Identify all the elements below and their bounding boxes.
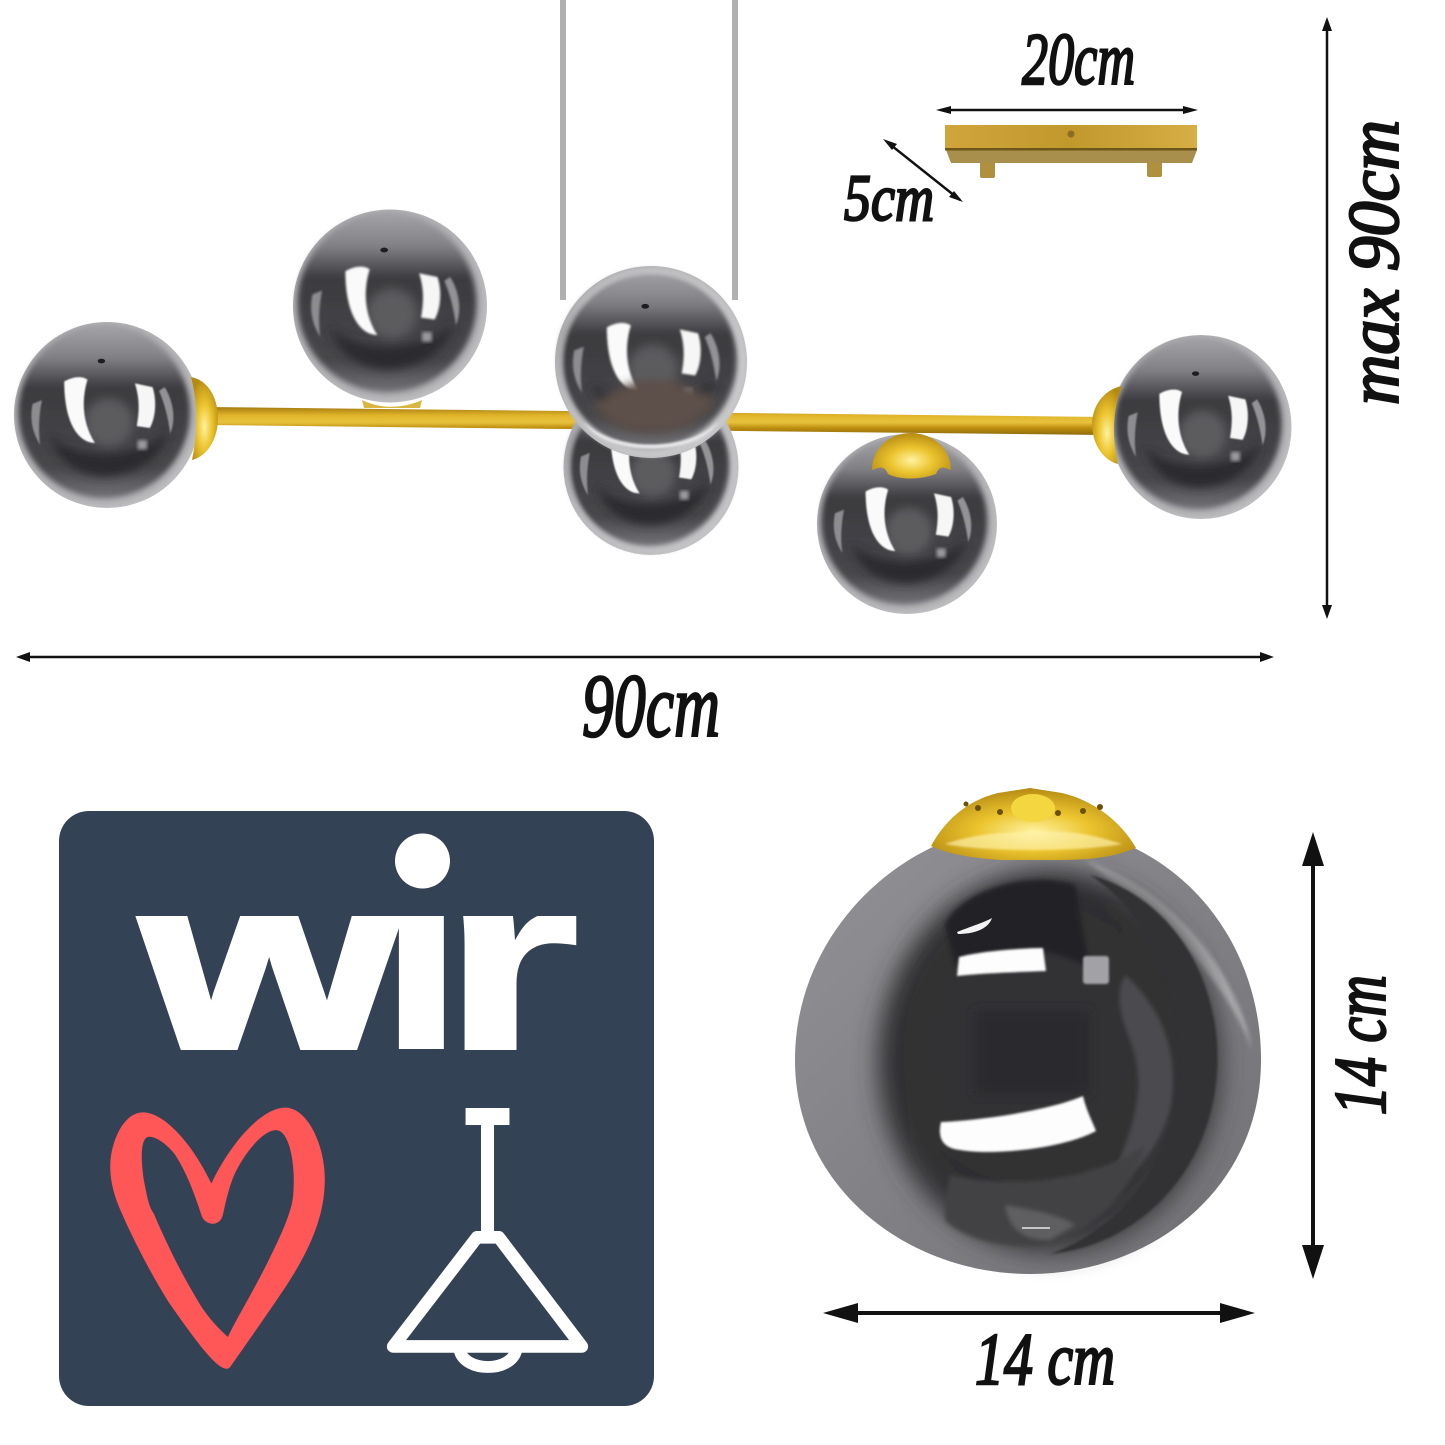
reflections — [957, 948, 1046, 976]
lower reflected band — [945, 1145, 1145, 1246]
single globe close-up — [795, 788, 1261, 1274]
plate legs — [980, 150, 1162, 178]
plate front — [945, 125, 1197, 150]
globe shell — [795, 846, 1261, 1274]
label: 20cm: 20cm — [1022, 19, 1135, 101]
shell upper-right sheen — [1085, 860, 1252, 1050]
label: max 90cm: max 90cm — [1334, 120, 1414, 405]
dark upper reflection — [945, 880, 1090, 970]
arrow: plate width — [936, 106, 1198, 114]
icon: heart — [110, 1108, 325, 1369]
pendant lamp — [14, 0, 1291, 614]
ceiling plate — [945, 125, 1197, 178]
wordmark: wir — [135, 834, 576, 1050]
gold socket: upper left — [362, 400, 422, 408]
label: 90cm: 90cm — [582, 657, 720, 756]
globe: far right — [1110, 335, 1292, 519]
right reflected band — [1105, 975, 1173, 1190]
mirrored inner sphere — [878, 870, 1222, 1254]
brand logo card — [59, 811, 654, 1406]
suspension cables — [560, 0, 738, 300]
gold socket: right — [1092, 386, 1122, 464]
gold socket: lower right — [872, 433, 951, 478]
gold socket: left — [191, 377, 218, 460]
arrow: max height — [1322, 17, 1332, 619]
gold cap — [931, 788, 1136, 860]
globe: front centre — [555, 266, 747, 458]
plate underside — [946, 150, 1197, 163]
label: 14 cm horizontal: 14 cm — [975, 1319, 1115, 1401]
gold horizontal rod — [205, 407, 1105, 435]
wordmark: wir: r — [441, 821, 580, 1103]
inner sphere crisp right edge — [1050, 875, 1217, 1254]
wordmark: wir: w — [136, 822, 399, 1103]
central reflected patch — [975, 1010, 1090, 1095]
arrow: globe width — [823, 1303, 1255, 1323]
icon: pendant lamp — [393, 1108, 582, 1367]
globe: lower right — [817, 434, 997, 614]
label: 14 cm vertical: 14 cm — [1320, 975, 1402, 1115]
globe: far left — [14, 322, 200, 508]
arrow: globe height — [1302, 832, 1324, 1279]
arrow: plate depth — [883, 139, 963, 202]
wordmark: wir: i — [376, 821, 467, 1102]
globe: lower centre — [564, 379, 738, 555]
arrow: total width — [16, 652, 1274, 662]
globe: upper left — [293, 210, 487, 402]
label: 5cm: 5cm — [844, 162, 934, 235]
